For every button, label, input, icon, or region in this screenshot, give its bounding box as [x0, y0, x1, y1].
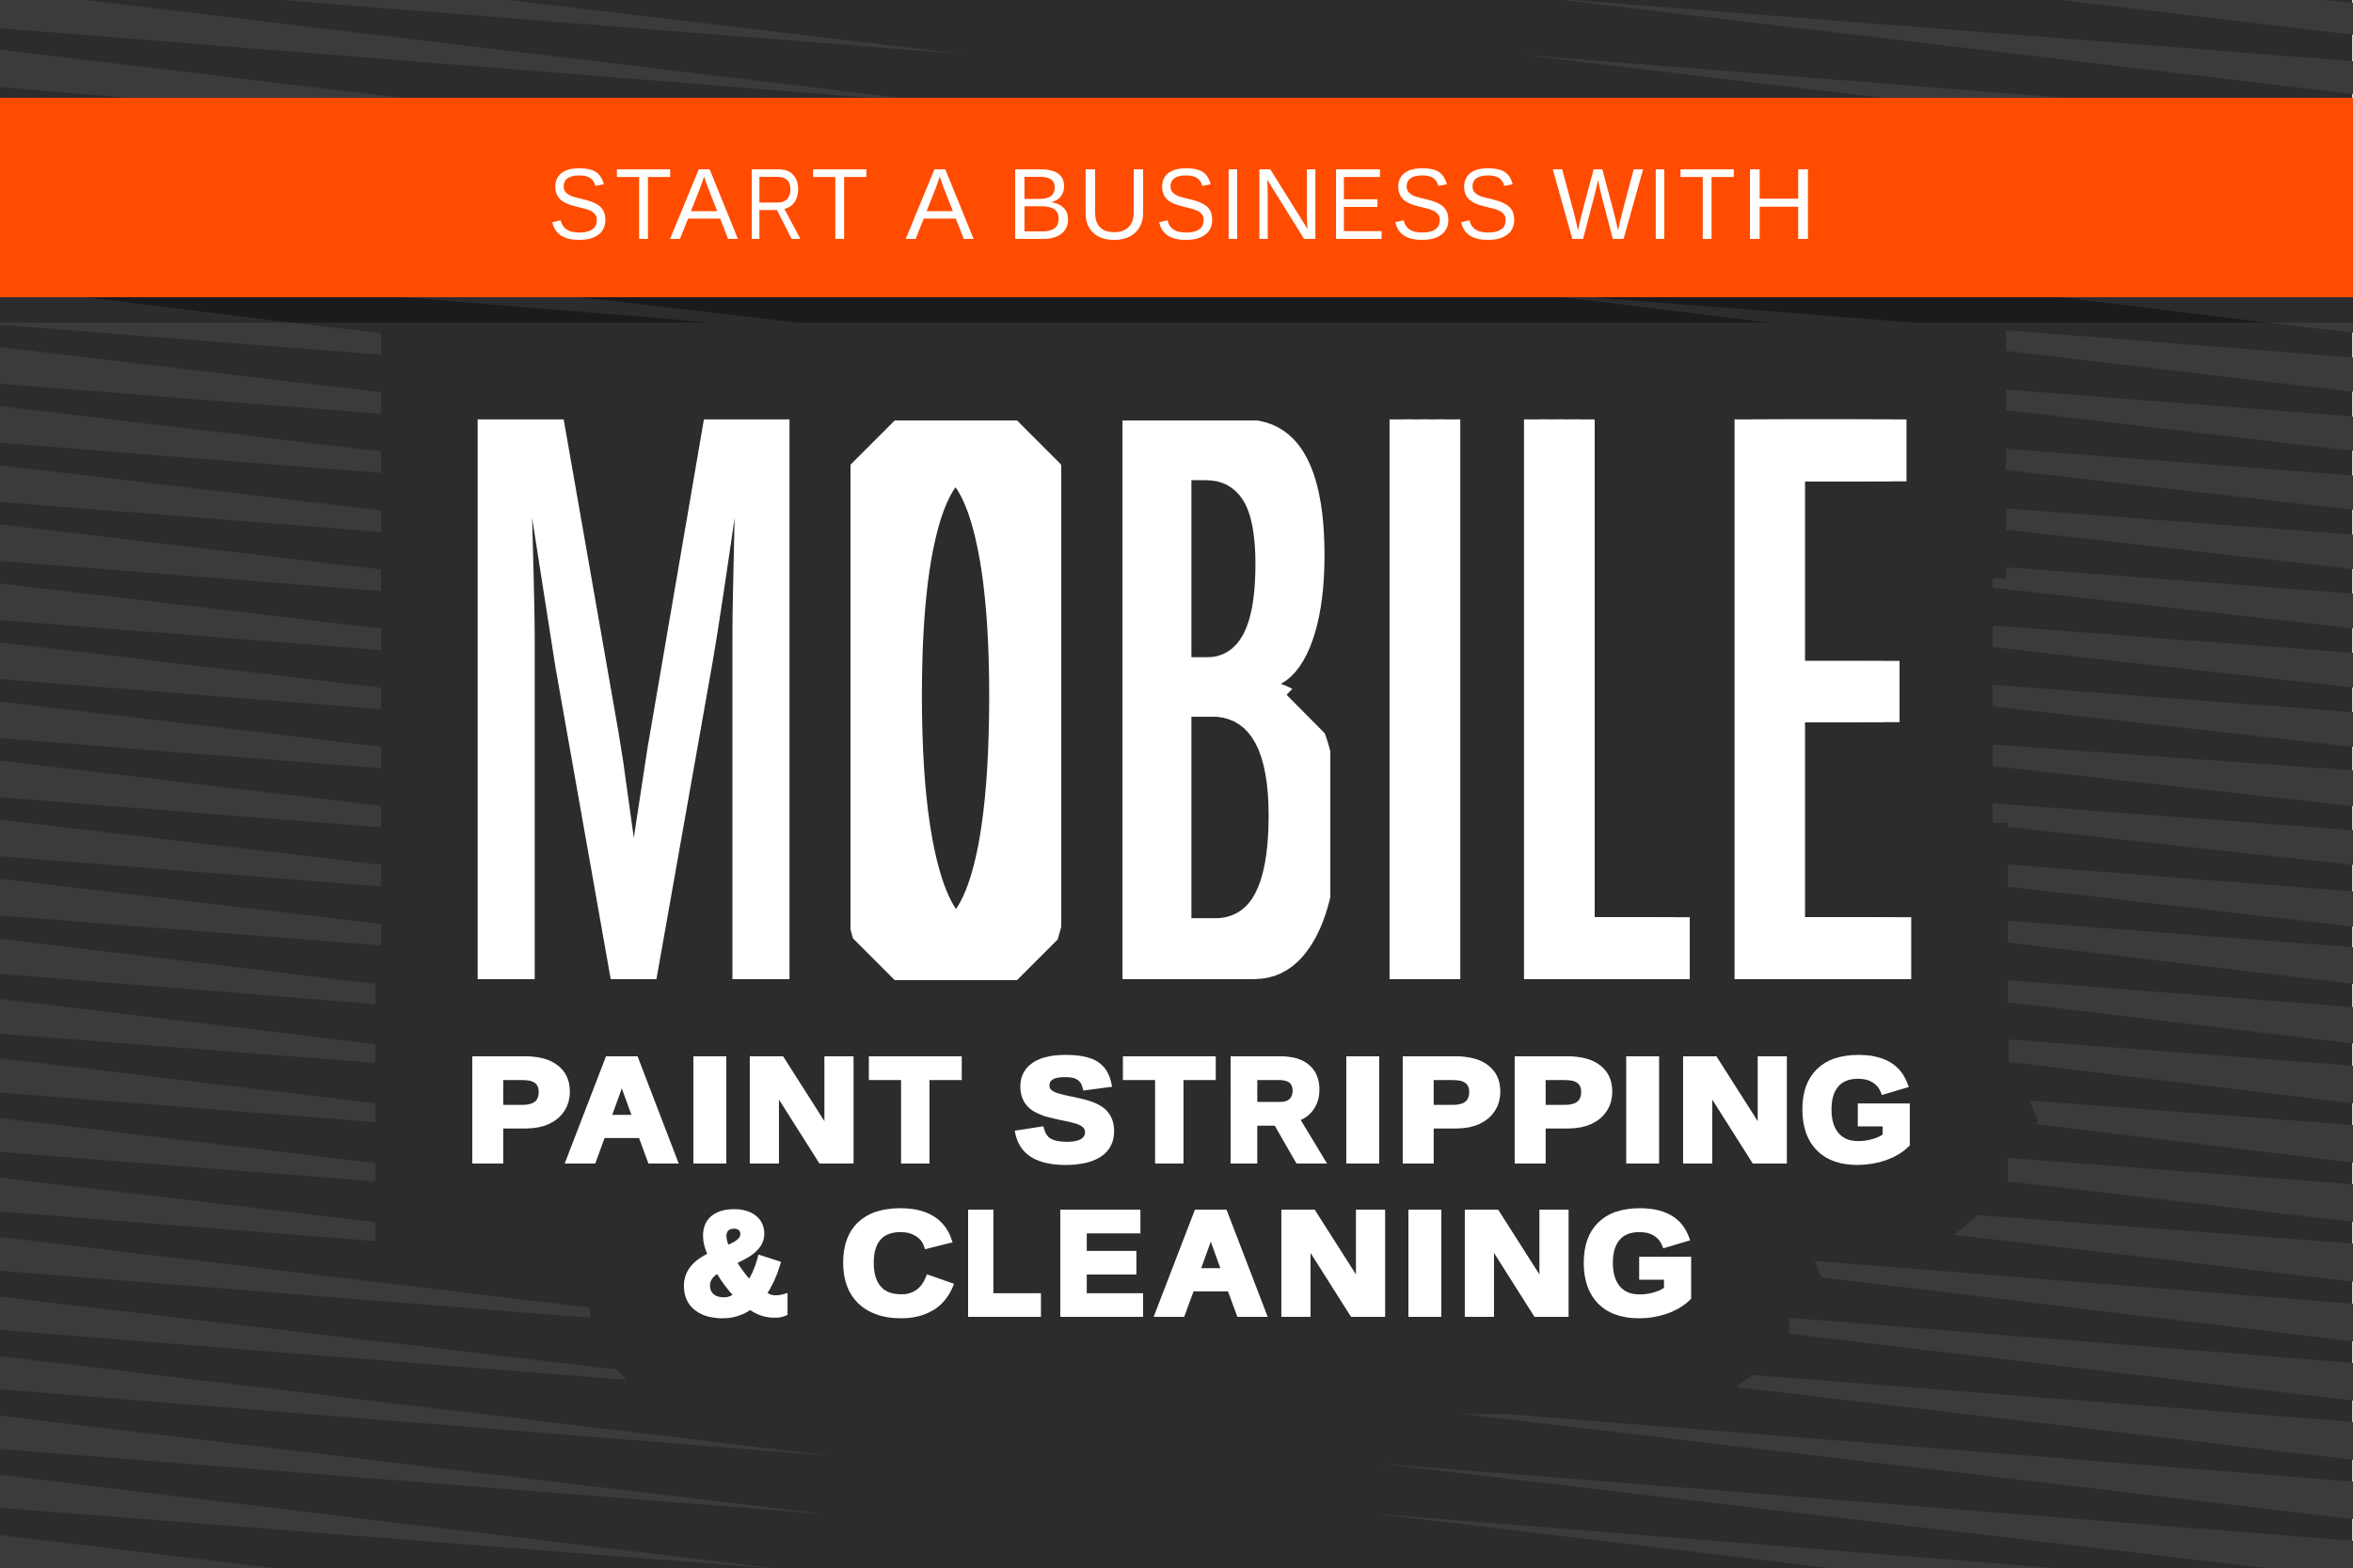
banner heading: I [1220, 148, 1246, 261]
banner heading: H [1741, 148, 1817, 261]
banner heading: S [1155, 148, 1216, 261]
title: MOBILE [448, 244, 1912, 1152]
subtitle line 2: N [1458, 1182, 1575, 1344]
subtitle line 1: N [1677, 1029, 1793, 1191]
subtitle line 1: T [871, 1029, 960, 1191]
banner heading: N [1251, 148, 1324, 261]
subtitle line 1: N [743, 1029, 860, 1191]
top stripes [0, 0, 2353, 98]
right stripes [1373, 323, 2353, 1568]
subtitle line 2: E [1055, 1182, 1145, 1344]
banner heading: S [1457, 148, 1518, 261]
letter M: M [448, 244, 819, 1152]
orange banner [0, 98, 2353, 297]
subtitle line 2: & [681, 1182, 788, 1344]
letter E: E [1715, 244, 1873, 1152]
subtitle line 1: I [1340, 1029, 1386, 1191]
banner heading: T [811, 148, 868, 261]
subtitle line 2: G [1582, 1182, 1696, 1344]
banner heading: A [905, 148, 974, 261]
subtitle line 1: P [466, 1029, 571, 1191]
banner heading: I [1647, 148, 1673, 261]
subtitle line 1: I [1619, 1029, 1666, 1191]
banner heading: T [615, 148, 673, 261]
subtitle line 1: G [1800, 1029, 1916, 1191]
letter I: I [1367, 244, 1435, 1152]
subtitle line 1: P [1396, 1029, 1502, 1191]
banner heading: E [1329, 148, 1385, 261]
banner heading: S [549, 148, 610, 261]
subtitle line 2: L [962, 1182, 1041, 1344]
banner heading: U [1078, 148, 1151, 261]
subtitle line 2: C [841, 1182, 953, 1344]
subtitle line 1: I [687, 1029, 733, 1191]
left stripes [0, 323, 833, 1568]
subtitle line 2: I [1402, 1182, 1448, 1344]
subtitle line 2: N [1275, 1182, 1391, 1344]
banner heading: S [1391, 148, 1453, 261]
banner heading: W [1552, 148, 1644, 261]
banner heading: T [1678, 148, 1736, 261]
subtitle line 1: T [1125, 1029, 1214, 1191]
subtitle line 1: S [1015, 1029, 1116, 1191]
subtitle line 1: A [566, 1029, 677, 1191]
banner shadow band [0, 297, 2353, 323]
letter L: L [1502, 244, 1654, 1152]
subtitle line 1: R [1225, 1029, 1324, 1191]
banner heading: A [670, 148, 739, 261]
subtitle line 2: A [1155, 1182, 1266, 1344]
banner heading: R [745, 148, 804, 261]
subtitle line 1: P [1508, 1029, 1614, 1191]
banner heading: B [1007, 148, 1073, 261]
